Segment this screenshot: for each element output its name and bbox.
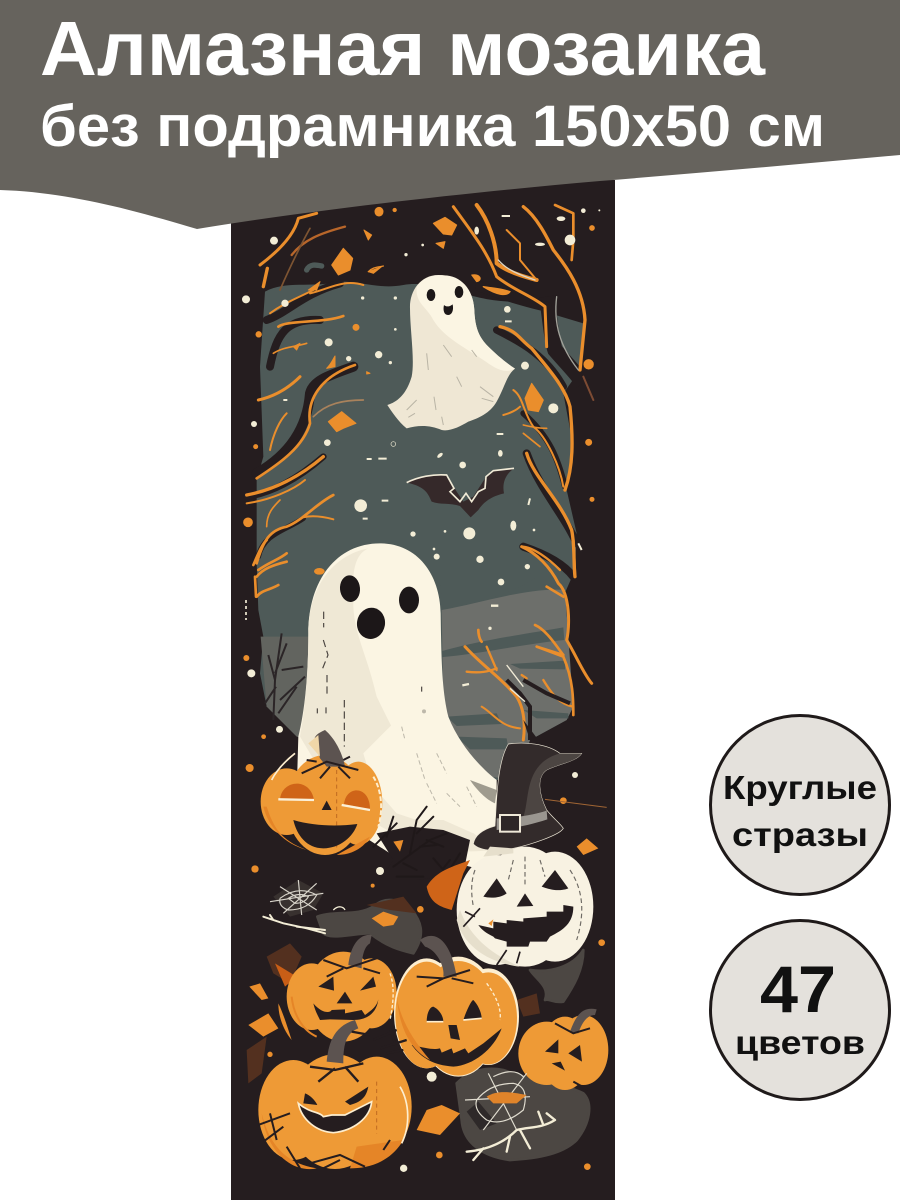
dark tree trunk right — [547, 297, 583, 383]
grey smoke mounds — [317, 900, 589, 1160]
upper artwork: sky, trees, small ghost, bat — [242, 205, 600, 780]
dark ground under ghost — [377, 827, 470, 880]
orange leaf behind white pumpkin — [427, 860, 470, 910]
leaf on grey mound — [372, 912, 398, 927]
snow dots — [242, 208, 600, 569]
header banner — [0, 0, 900, 229]
pumpkin: bottom left large — [258, 1020, 412, 1169]
badge: round rhinestones: Круглые — [723, 769, 877, 806]
bat — [407, 468, 514, 517]
dots — [246, 579, 504, 733]
title line 1: Алмазная мозаика — [40, 6, 766, 92]
pumpkin: middle left — [287, 935, 397, 1042]
big ghost — [297, 543, 497, 873]
small ghost — [387, 275, 515, 430]
twig over ghost — [373, 807, 460, 880]
bottom cream dots — [276, 726, 578, 1172]
badge: round rhinestones: стразы — [732, 816, 868, 853]
pumpkin: right small — [518, 1009, 608, 1090]
lower sky band — [261, 572, 573, 780]
middle artwork: horizon and big ghost — [243, 540, 592, 780]
title line 2: без подрамника 150х50 см — [40, 94, 825, 159]
dark trunks low — [507, 680, 570, 740]
bare trees left of ghost — [265, 633, 305, 720]
poster: halloween diamond mosaic artwork — [231, 180, 615, 1200]
pumpkin: top left smiling — [261, 730, 382, 855]
black tuft between pumpkins — [352, 1028, 407, 1053]
pumpkin: middle centre — [394, 936, 519, 1077]
orange leaves — [244, 207, 594, 527]
badge: 47 colours: 47 — [760, 952, 836, 1026]
dark branches left — [247, 283, 577, 577]
witch hat — [473, 743, 582, 850]
badge: 47 colours: цветов — [735, 1024, 865, 1061]
ghost lower shading — [363, 720, 497, 833]
badge: round rhinestones — [710, 716, 890, 894]
night sky — [257, 282, 583, 780]
lower cobweb and bones — [465, 1072, 555, 1160]
leaf on hat brim — [577, 838, 598, 855]
orange branches — [247, 205, 593, 577]
line from hat dot — [545, 799, 607, 807]
orange dots and leaves — [246, 735, 605, 1170]
badge: 47 colours — [710, 920, 890, 1100]
cobweb upper left — [263, 880, 345, 933]
orange branches low — [253, 540, 592, 740]
white pumpkin with hat — [457, 847, 593, 967]
orange dots — [243, 568, 325, 772]
brown hatch patches — [247, 897, 540, 1083]
lower artwork: pumpkins, hat, cobwebs — [246, 720, 608, 1172]
